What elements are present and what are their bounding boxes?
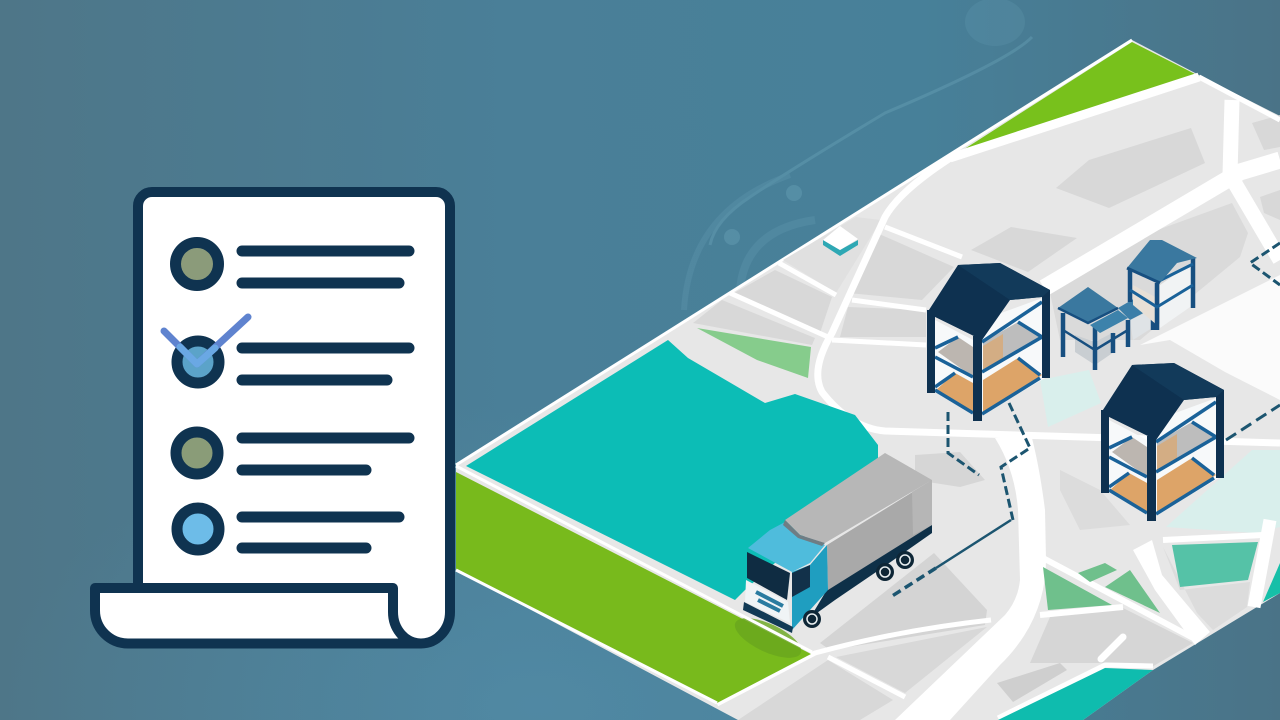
background swirl decoration: [684, 0, 1032, 310]
white roads: [717, 77, 1280, 718]
side window: [792, 565, 810, 597]
item 4: [177, 508, 399, 550]
roof fairing: [783, 520, 825, 546]
item 1: [176, 242, 409, 286]
warehouse: small center: [1058, 287, 1153, 370]
white shoreline: [456, 466, 812, 703]
green area shadow: [729, 610, 807, 666]
check mark: [164, 317, 248, 364]
city blocks: [693, 115, 1280, 720]
warehouse: large left: [927, 263, 1050, 421]
top green area: [955, 42, 1199, 155]
truck: [743, 453, 932, 633]
wheel rims: [807, 555, 910, 624]
page body: [95, 192, 450, 644]
lower green area: [456, 472, 811, 703]
cab roof: [748, 522, 825, 572]
item 2: [177, 341, 409, 383]
green patches: [697, 328, 1280, 720]
cargo box: [785, 453, 932, 543]
map: [456, 40, 1280, 720]
pale teal blocks: [1040, 370, 1280, 533]
windshield: [747, 552, 790, 600]
warehouse: large right: [1101, 363, 1224, 521]
item 3: [176, 432, 409, 474]
chassis: [810, 524, 932, 618]
checklist document: [95, 192, 450, 644]
open white plaza: [1140, 275, 1280, 400]
branch road: [1133, 540, 1210, 645]
grille mark: [756, 592, 783, 611]
bumper: [743, 602, 793, 633]
main road: [895, 438, 1046, 720]
warehouse: small right: [1127, 240, 1197, 330]
teal water: [466, 340, 878, 600]
wheels: [803, 551, 914, 628]
map base: [456, 40, 1280, 720]
small marker: [823, 226, 858, 256]
map edge highlight: [456, 40, 1132, 465]
dashed routes: [889, 243, 1280, 598]
cab side: [792, 545, 828, 630]
cab front: [745, 580, 790, 623]
